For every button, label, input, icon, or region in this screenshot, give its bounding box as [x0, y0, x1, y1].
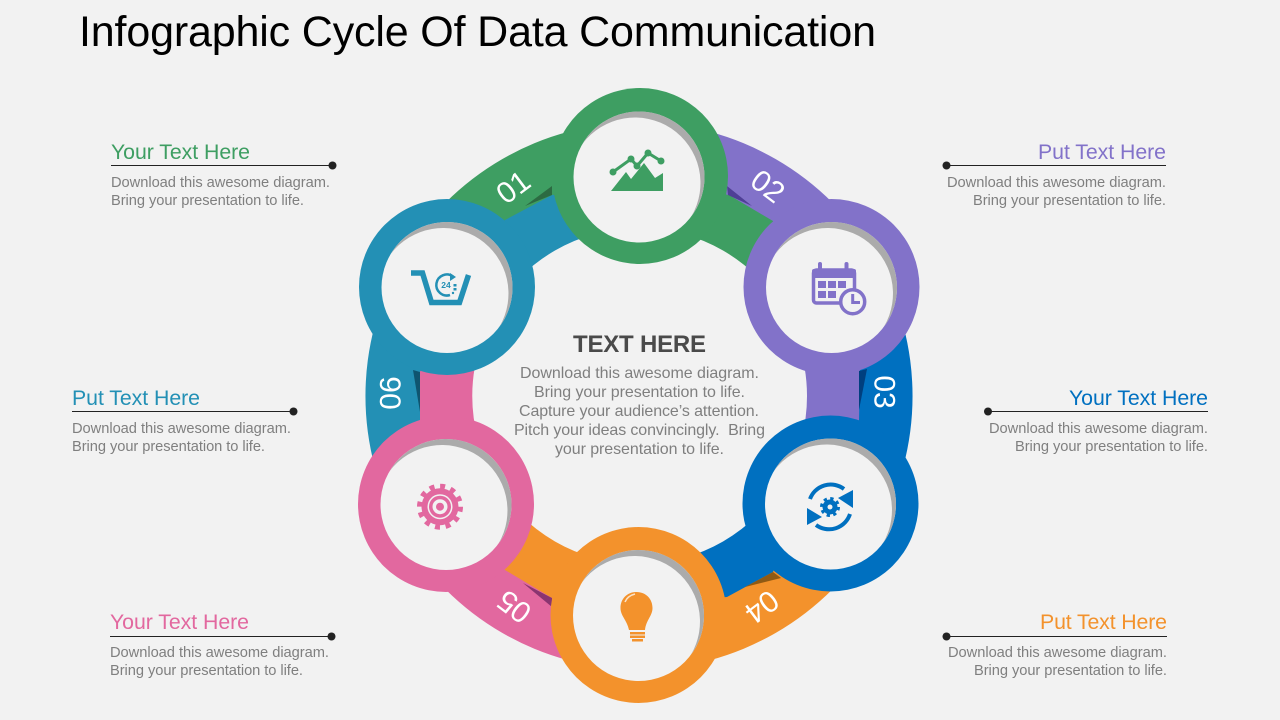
callout: teal: [72, 386, 298, 455]
center heading: TEXT HERE: [573, 331, 706, 358]
fold: dark green: [525, 186, 552, 206]
ring: green: [552, 88, 728, 264]
icon: sync gear: [807, 485, 853, 529]
callout: pink: Bring your presentation to life.: [110, 663, 303, 679]
center body: Pitch your ideas convincingly. Bring: [514, 422, 765, 439]
band: orange inner: [470, 480, 639, 600]
fold: dark purple: [727, 186, 752, 206]
callout: green: Your Text Here: [111, 140, 250, 164]
callout: orange: [942, 610, 1167, 679]
band: blue inner: [639, 480, 790, 600]
callout: green: [111, 140, 336, 209]
callout: teal: Download this awesome diagram.: [72, 421, 291, 437]
band: 04 outer orange: [639, 496, 876, 670]
center body: Download this awesome diagram.: [520, 365, 759, 382]
icon: calendar and clock: [812, 262, 865, 314]
icon: 24 hour basket: [411, 273, 468, 302]
icon: gear: [420, 486, 460, 527]
callout: blue: Your Text Here: [1069, 386, 1208, 410]
callout: purple: Download this awesome diagram.: [947, 175, 1166, 191]
icon: light bulb: [620, 592, 652, 642]
band: 02 outer purple: [639, 122, 876, 296]
icon: 24 hour basket: 24: [441, 280, 451, 290]
center body: [514, 365, 765, 458]
cycle diagram: [358, 88, 920, 703]
callout: purple: Put Text Here: [1038, 140, 1166, 164]
number 02: 02: [744, 164, 791, 210]
fold: dark blue: [859, 369, 867, 410]
fold: dark teal: [413, 370, 420, 412]
band: 06 outer teal: [365, 259, 466, 533]
band: purple inner: [784, 300, 860, 480]
ring: purple: [744, 199, 920, 375]
callout: pink: [110, 610, 336, 679]
band: 05 outer pink: [402, 496, 639, 670]
band: pink inner: [420, 300, 495, 480]
ring: orange: [550, 527, 726, 703]
callout: orange: Put Text Here: [1040, 610, 1167, 634]
callout: purple: Bring your presentation to life.: [973, 193, 1166, 209]
fold: dark pink: [523, 583, 552, 607]
callout: blue: Bring your presentation to life.: [1015, 439, 1208, 455]
ring: blue: [742, 416, 918, 592]
number 01: 01: [490, 165, 537, 211]
ring: pink: [358, 416, 534, 592]
number 06: 06: [374, 376, 408, 410]
callout: green: Download this awesome diagram.: [111, 175, 330, 191]
center body: Capture your audience’s attention.: [519, 403, 759, 420]
callout: teal: Bring your presentation to life.: [72, 439, 265, 455]
fold: brown: [745, 572, 781, 587]
ring: teal: [359, 199, 535, 375]
callout: orange: Bring your presentation to life.: [974, 663, 1167, 679]
center body: your presentation to life.: [555, 441, 724, 458]
callout: blue: Download this awesome diagram.: [989, 421, 1208, 437]
band: teal inner: [470, 190, 639, 312]
band: 03 outer blue: [812, 259, 913, 533]
icon: mountain chart: [610, 150, 664, 191]
center text block: [514, 331, 765, 458]
callout: pink: Your Text Here: [110, 610, 249, 634]
callout: green: Bring your presentation to life.: [111, 193, 304, 209]
number 05: 05: [491, 583, 538, 629]
band: green inner: [639, 190, 800, 312]
callout: pink: Download this awesome diagram.: [110, 645, 329, 661]
center body: Bring your presentation to life.: [534, 384, 745, 401]
callout: orange: Download this awesome diagram.: [948, 645, 1167, 661]
number 03: 03: [868, 375, 900, 409]
callout: teal: Put Text Here: [72, 386, 200, 410]
callout: purple: [942, 140, 1166, 209]
callout: blue: [984, 386, 1208, 455]
number 04: 04: [738, 583, 785, 629]
band: 01 outer green: [402, 122, 639, 296]
title: Infographic Cycle Of Data Communication: [79, 8, 876, 56]
